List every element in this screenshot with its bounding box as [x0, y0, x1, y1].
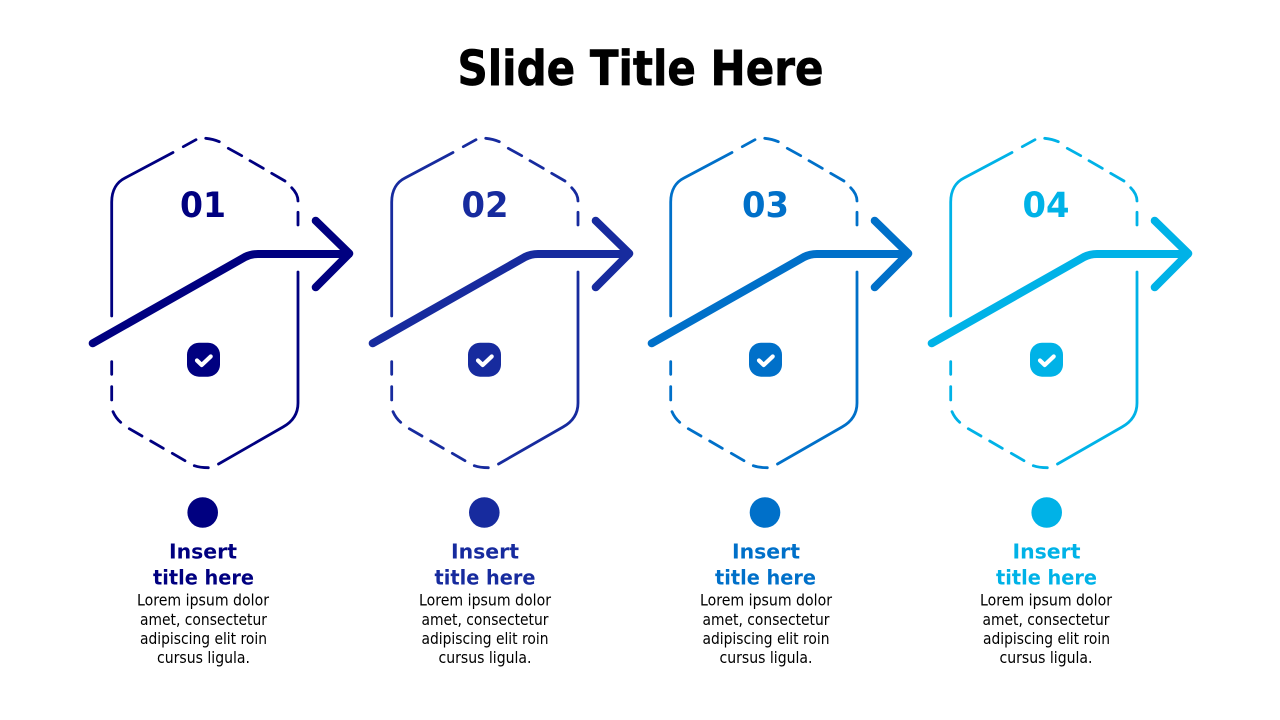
title: Slide Title Here	[458, 41, 824, 97]
number 03: 03	[742, 186, 789, 226]
body text 02: amet, consectetur	[422, 610, 549, 629]
heading 03: title here	[715, 566, 816, 590]
icon: check badge 01	[187, 343, 220, 377]
body text 04: amet, consectetur	[982, 610, 1110, 629]
heading 04: title here	[996, 566, 1097, 590]
heading 03	[715, 540, 816, 590]
body text 04	[980, 590, 1112, 667]
body text 03: amet, consectetur	[702, 610, 830, 629]
body text 01: adipiscing elit roin	[140, 629, 267, 648]
marker dot 01	[187, 497, 218, 528]
body text 02: cursus ligula.	[438, 648, 532, 667]
body text 02	[419, 590, 551, 667]
heading 02: title here	[434, 566, 536, 590]
number 04: 04	[1022, 186, 1070, 226]
arrow 01	[93, 221, 349, 343]
hexagon outline 03	[671, 138, 857, 468]
heading 02	[434, 540, 536, 590]
body text 04: adipiscing elit roin	[983, 629, 1110, 648]
body text 02: adipiscing elit roin	[422, 629, 548, 648]
body text 04: cursus ligula.	[1000, 648, 1092, 667]
panel: step 01	[93, 138, 349, 667]
heading 02: Insert	[451, 540, 519, 564]
icon: check badge 04	[1030, 343, 1063, 377]
panel: step 04	[932, 138, 1188, 667]
panel: step 02	[373, 138, 629, 667]
heading 01: title here	[153, 566, 254, 590]
body text 03: adipiscing elit roin	[702, 629, 830, 648]
number 02: 02	[462, 186, 508, 226]
marker dot 02	[469, 497, 500, 528]
heading 04	[996, 540, 1097, 590]
body text 03: Lorem ipsum dolor	[700, 590, 832, 610]
marker dot 04	[1031, 497, 1062, 528]
heading 04: Insert	[1012, 540, 1081, 564]
icon: check badge 02	[468, 343, 501, 377]
body text 01: amet, consectetur	[140, 610, 267, 629]
body text 04: Lorem ipsum dolor	[980, 590, 1112, 610]
body text 02: Lorem ipsum dolor	[419, 590, 551, 610]
number 01: 01	[180, 186, 226, 226]
hexagon outline 04	[951, 138, 1137, 468]
arrow 03	[652, 221, 908, 343]
body text 01	[137, 590, 269, 667]
panel: step 03	[652, 138, 908, 667]
body text 01: Lorem ipsum dolor	[137, 590, 269, 610]
marker dot 03	[750, 497, 780, 528]
body text 03: cursus ligula.	[720, 648, 812, 667]
body text 01: cursus ligula.	[157, 648, 250, 667]
arrow 02	[373, 221, 629, 343]
body text 03	[700, 590, 832, 667]
icon: check badge 03	[749, 343, 782, 377]
arrow 04	[932, 221, 1188, 343]
heading 01: Insert	[169, 540, 237, 564]
heading 03: Insert	[732, 540, 800, 564]
hexagon outline 01	[112, 138, 298, 468]
heading 01	[153, 540, 254, 590]
hexagon outline 02	[392, 138, 578, 468]
